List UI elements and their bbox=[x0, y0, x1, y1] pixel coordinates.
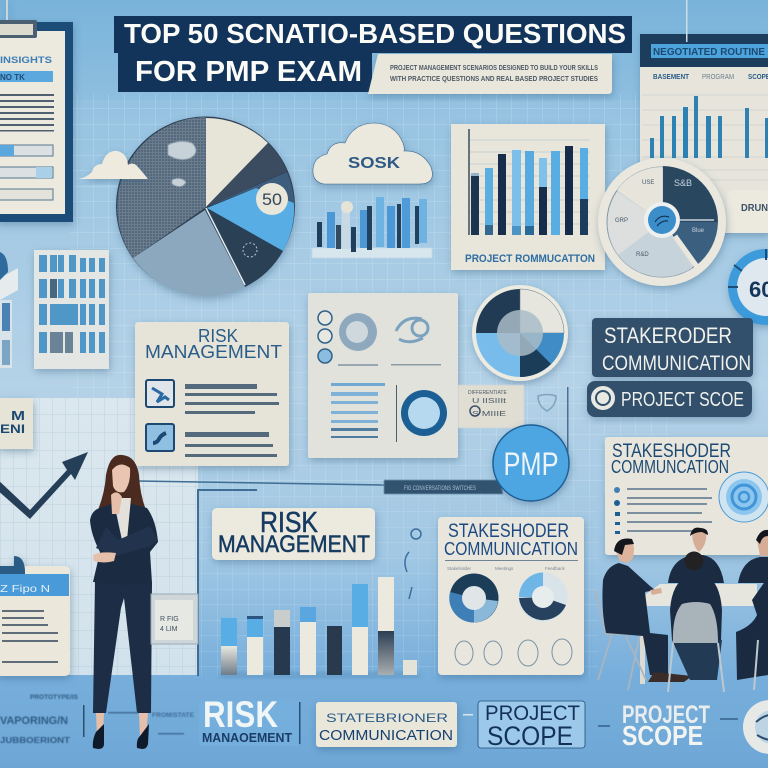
list lines bbox=[331, 383, 385, 438]
footer: blurred left note: JUBBOERIONT bbox=[0, 736, 70, 745]
label: project scope pill bbox=[587, 381, 752, 417]
badge: 50 bbox=[256, 183, 288, 215]
hand at chin bbox=[111, 492, 122, 514]
donut right bbox=[518, 572, 568, 622]
left bottom note card bbox=[0, 556, 70, 676]
title bar: second line bbox=[118, 52, 372, 92]
small note card: S MIIIE bbox=[472, 411, 506, 418]
panel: stakeholder communication center: COMMUNICATION bbox=[444, 539, 578, 559]
face bbox=[112, 464, 130, 492]
icon: shield outline bbox=[538, 394, 556, 411]
footer: stakeholder card: COMMUNICATION bbox=[319, 727, 453, 744]
small calendar card: 4 LIM bbox=[160, 626, 178, 633]
footer: project scope white bbox=[622, 701, 710, 751]
dial chart: S&B bbox=[674, 178, 692, 188]
footer: project scope card: SCOPE bbox=[487, 721, 573, 751]
left person chair bbox=[595, 590, 646, 690]
label: risk management: MANAGEMENT bbox=[218, 531, 370, 558]
far person bbox=[668, 555, 724, 583]
footer: risk management bbox=[199, 694, 300, 746]
label: risk management: RISK bbox=[260, 507, 319, 539]
table bbox=[635, 584, 757, 606]
slice: textured dark bbox=[117, 117, 206, 258]
middle panel: icons and list bbox=[308, 293, 458, 458]
title bar: first line bbox=[114, 16, 632, 53]
bullet list bbox=[614, 487, 712, 534]
footer: stakeholder card: STATEBRIONER bbox=[326, 711, 448, 725]
bar chart bottom bbox=[220, 577, 420, 678]
back person chair bbox=[668, 602, 724, 692]
panel: risk management: MANAGEMENT bbox=[145, 342, 282, 362]
jacket bbox=[90, 503, 158, 585]
top-right panel with bar chart: BASEMENT bbox=[653, 74, 690, 81]
meeting group bbox=[595, 528, 768, 692]
title banner bbox=[114, 16, 632, 94]
shoes bbox=[93, 724, 149, 749]
round portrait bbox=[339, 313, 377, 351]
footer: project scope white: PROJECT bbox=[622, 701, 710, 729]
map patch bbox=[168, 141, 196, 187]
hair back bbox=[98, 455, 146, 510]
quadrant circle bbox=[472, 285, 568, 381]
chart wall panel behind woman bbox=[0, 398, 384, 676]
panel: stakeholder communication center: Stakeholder bbox=[447, 566, 472, 571]
small note card: U IISIIIt bbox=[472, 398, 506, 405]
slice: navy bbox=[206, 208, 283, 287]
footer: blurred left note: PROTOTYPE/IS bbox=[30, 694, 79, 701]
left bottom note card: Z Fipo N bbox=[0, 584, 50, 595]
left small label card: ENI bbox=[0, 422, 25, 436]
left person bbox=[602, 563, 668, 675]
title subtitle card: PROJECT MANAGEMENT SCENARIOS DESIGNED TO BUILD YOUR SKILLS bbox=[390, 63, 598, 72]
panel heading: RISK bbox=[198, 326, 238, 346]
small note card: DIFFERENTIATE bbox=[468, 390, 507, 396]
panel: stakeholder communication right bbox=[605, 437, 768, 555]
footer: faint captions bbox=[108, 712, 194, 734]
spiral icon bbox=[719, 472, 768, 522]
sketch icons bbox=[455, 639, 572, 666]
building window grid bbox=[34, 250, 109, 369]
left edge building bbox=[0, 252, 18, 368]
PMP badge: PMP bbox=[504, 446, 558, 482]
donut left bbox=[449, 574, 498, 623]
small cloud bbox=[78, 151, 148, 179]
icon: tools bbox=[146, 380, 174, 407]
back person legs bbox=[672, 640, 722, 680]
left small label card bbox=[0, 398, 33, 449]
panel: stakeholder communication center bbox=[438, 517, 584, 675]
icons column bbox=[318, 311, 332, 363]
dial chart bbox=[598, 158, 726, 286]
clipboard: top-left document: NO TK bbox=[0, 73, 25, 82]
panel: stakeholder communication center: Feedback bbox=[545, 566, 566, 571]
chart caption: PROJECT ROMMUCATTON bbox=[465, 253, 595, 265]
label: stakeholder communication dark bbox=[592, 318, 753, 377]
footer: stakeholder card bbox=[316, 702, 457, 747]
label: risk management bbox=[212, 507, 375, 560]
woman standing bbox=[90, 455, 158, 749]
bars bbox=[471, 146, 588, 235]
back person bbox=[670, 576, 722, 640]
panel heading: STAKESHODER bbox=[612, 441, 731, 462]
dark strip caption: FIG CONVERSATIONS SWITCHES bbox=[404, 486, 476, 492]
footer: connectors bbox=[598, 719, 738, 726]
panel: stakeholder communication right: COMMUNCATION bbox=[611, 457, 729, 477]
bars bbox=[650, 96, 768, 158]
crossed arm bbox=[96, 526, 158, 556]
top-right panel with bar chart bbox=[640, 34, 768, 233]
footer: risk management: MANAOEMENT bbox=[202, 730, 292, 745]
dial: dark sector bbox=[663, 166, 718, 222]
footer: risk management: RISK bbox=[203, 694, 278, 735]
footer: project scope card: PROJECT bbox=[485, 702, 580, 725]
ankles bbox=[96, 713, 148, 738]
small calendar card bbox=[151, 594, 198, 644]
badge: 50: 50 bbox=[262, 190, 282, 209]
footer: project scope white: SCOPE bbox=[622, 720, 703, 751]
footer: blurred left note: VAPORING/N bbox=[0, 715, 68, 727]
title text line 2: FOR PMP EXAM bbox=[135, 56, 362, 88]
dial chart: GRP bbox=[615, 218, 628, 224]
footer: round icon bbox=[743, 700, 768, 754]
dial: light sector bbox=[617, 167, 662, 222]
shirt bbox=[116, 498, 131, 540]
ring bbox=[401, 390, 447, 436]
icon: phone bbox=[146, 424, 174, 451]
slice: grey-blue bbox=[133, 210, 245, 296]
dial: centre bbox=[644, 202, 680, 238]
text lines bbox=[185, 384, 279, 414]
left small label card: M bbox=[11, 408, 25, 423]
bar chart panel: project communication bbox=[451, 124, 605, 270]
sketch glyphs bbox=[405, 529, 421, 599]
clipboard: top-left document bbox=[0, 0, 73, 222]
slice: cream bbox=[206, 118, 268, 207]
label: stakeholder communication dark: STAKERODER bbox=[604, 323, 732, 348]
title subtitle card bbox=[368, 54, 612, 94]
panel: risk management bbox=[135, 322, 289, 466]
top-right panel with bar chart: PROGRAM bbox=[702, 74, 734, 81]
dial chart: Blue bbox=[692, 228, 705, 234]
text lines bbox=[185, 432, 277, 457]
cloud label: SOSK bbox=[313, 123, 432, 184]
top-right panel with bar chart: NEGOTIATED ROUTINE bbox=[653, 47, 765, 58]
legs bbox=[93, 580, 152, 713]
pie chart bbox=[116, 116, 295, 296]
small bars under cloud bbox=[312, 197, 432, 258]
cloud label: SOSK: SOSK bbox=[348, 155, 401, 172]
vertical tick bbox=[567, 387, 568, 453]
small calendar card: R FIG bbox=[160, 616, 179, 623]
title subtitle card: WITH PRACTICE QUESTIONS AND REAL BASED PROJECT STUDIES bbox=[390, 74, 598, 83]
arrow: upward trend bbox=[0, 452, 88, 519]
swirl sketch bbox=[396, 318, 428, 342]
cup badge at right bbox=[727, 190, 768, 233]
dial chart: USE bbox=[642, 180, 654, 186]
small note card bbox=[458, 385, 524, 428]
panel: stakeholder communication center: Meetings bbox=[495, 566, 514, 571]
60 gauge bbox=[728, 249, 768, 325]
dial chart: R&D bbox=[636, 252, 649, 258]
slice: blue bbox=[207, 188, 294, 251]
clipboard: top-left document: INSIGHTS bbox=[0, 55, 52, 65]
footer: project scope card bbox=[478, 701, 585, 751]
slice: shaded wedge bbox=[206, 143, 287, 207]
PMP badge bbox=[493, 425, 569, 501]
panel heading: STAKESHODER bbox=[448, 521, 569, 542]
right person bbox=[738, 557, 768, 583]
right seated person bbox=[736, 577, 768, 680]
footer: blurred left note bbox=[0, 694, 79, 745]
dark strip caption bbox=[384, 480, 503, 494]
footer: connector bbox=[463, 714, 473, 716]
footer: faint captions: FROM/STATE bbox=[152, 713, 194, 719]
title text line 1: TOP 50 SCNATIO-BASED QUESTIONS bbox=[124, 18, 626, 49]
